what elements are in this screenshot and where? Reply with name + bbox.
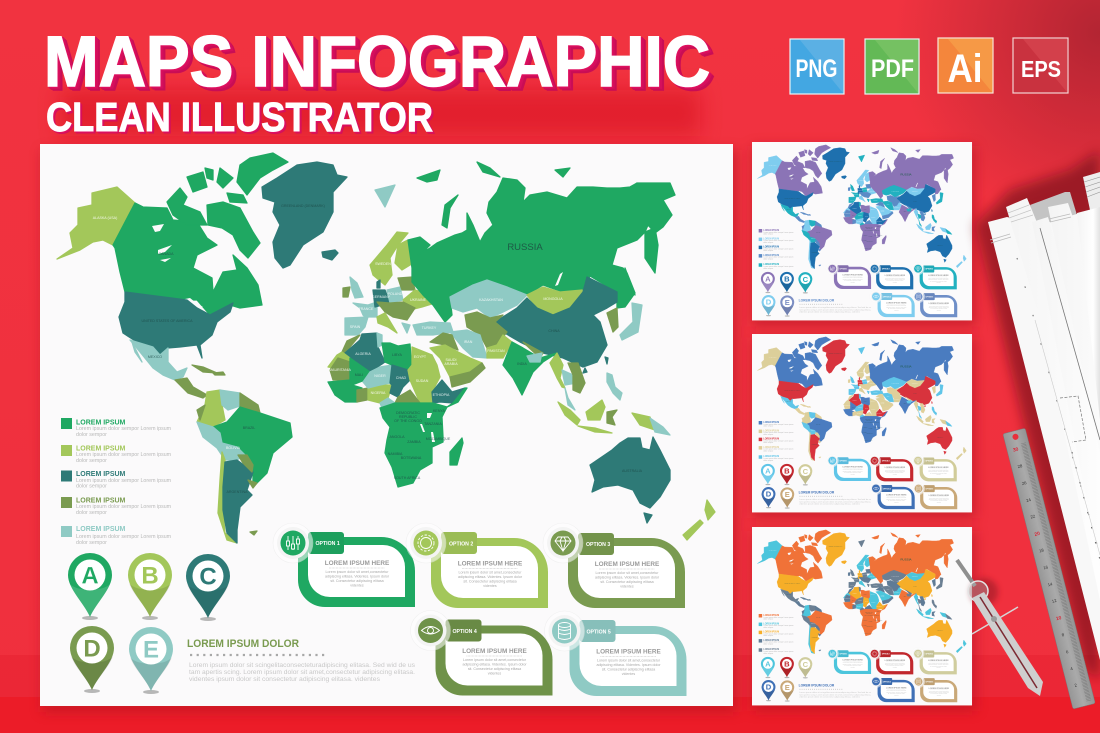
- icon: eye: [410, 610, 450, 650]
- world map: NAMIBIA: [388, 452, 403, 456]
- legend item 4: [61, 497, 172, 516]
- legend item 1: dolor sempor: [76, 432, 107, 438]
- world map: INDIA: [517, 362, 527, 366]
- legend item 2: Lorem ipsum dolor sempor Lorem ipsum: [76, 452, 172, 458]
- card: option 5: Lorem ipsum dolor sit amet,consectetur: [597, 658, 661, 662]
- card: option 5: [544, 611, 686, 696]
- world map: EGYPT: [414, 355, 427, 359]
- world map: CANADA: [159, 252, 174, 256]
- ruler: 18: [1038, 547, 1045, 553]
- card: option 1: videntes: [350, 584, 364, 588]
- title shadow: [60, 90, 700, 136]
- legend item 3: [61, 470, 172, 490]
- Russia: [408, 178, 675, 322]
- world map: REPUBLIC: [399, 415, 417, 419]
- legend item 1: LOREM IPSUM: [76, 420, 126, 426]
- legend item 3: dolor sempor: [76, 484, 107, 490]
- subtitle: CLEAN ILLUSTRATOR: [46, 94, 433, 140]
- card: option 2: LOREM IPSUM HERE: [458, 560, 523, 568]
- ruler: 26: [1021, 480, 1028, 486]
- card: option 2: [406, 523, 548, 608]
- card: option 3: videntes: [620, 584, 634, 588]
- legend item 2: LOREM IPSUM: [76, 446, 126, 452]
- tab: OPTION 1: [316, 541, 340, 547]
- pin C: C: [199, 564, 217, 590]
- world map: OF THE CONGO: [394, 419, 422, 423]
- world map: ARGENTINA: [227, 490, 248, 494]
- card: option 1: sit. Consectetur adipiscing elitasa: [330, 579, 384, 583]
- badge: PNG: [790, 39, 844, 94]
- world map: LIBYA: [392, 353, 403, 357]
- ruler: 2: [1074, 682, 1078, 688]
- legend item 5: LOREM IPSUM: [76, 526, 126, 533]
- blueprint rolls: [975, 150, 1100, 700]
- world map: FRANCE: [359, 307, 374, 311]
- ruler: 30: [1012, 447, 1019, 454]
- ruler: 4: [1070, 666, 1074, 671]
- world map: MOZAMBIQUE: [426, 437, 451, 441]
- world map: MALI: [355, 373, 363, 377]
- legend item 4: Lorem ipsum dolor sempor Lorem ipsum: [76, 504, 172, 510]
- card: option 5: videntes: [622, 672, 635, 676]
- world map: ARABIA: [444, 362, 458, 366]
- pin B: B: [141, 562, 159, 590]
- card: option 3: adipiscing elitasa. Videntes. Ipsum dolor: [595, 576, 660, 580]
- world map: GREENLAND (DENMARK): [281, 204, 325, 208]
- legend item 2: [61, 445, 172, 464]
- legend item 5: Lorem ipsum dolor sempor Lorem ipsum: [76, 534, 172, 540]
- world map: MONGOLIA: [543, 297, 563, 301]
- world map: BRAZIL: [243, 426, 255, 430]
- card: option 4: Lorem ipsum dolor sit amet,consectetur: [463, 658, 527, 662]
- Africa: [342, 335, 360, 353]
- ruler: 12: [1051, 598, 1058, 604]
- world map: ANGOLA: [390, 435, 405, 439]
- card: option 2: sit. Consectetur adipiscing elitasa: [463, 580, 517, 584]
- card: option 5: LOREM IPSUM HERE: [596, 648, 662, 656]
- world map: SAUDI: [446, 358, 456, 362]
- world map: SWEDEN: [375, 262, 391, 266]
- badge: EPS: [1013, 38, 1068, 93]
- ruler: 24: [1026, 497, 1032, 503]
- text block: lorem ipsum dolor: Lorem ipsum dolor sit scingelitaconsecteturadipiscing elitasa. Sed wid de us: [189, 662, 415, 669]
- world map: TURKEY: [422, 326, 437, 330]
- badge: Ai: [938, 38, 993, 93]
- tab: [578, 533, 614, 555]
- legend item 1: [61, 418, 172, 438]
- world map: GERMANY: [372, 295, 391, 299]
- badge: PDF: [865, 39, 919, 94]
- world map: MEXICO: [148, 355, 162, 359]
- ruler: 20: [1034, 531, 1041, 538]
- tab: OPTION 4: [452, 629, 477, 635]
- world map: KAZAKHSTAN: [479, 298, 503, 302]
- world map: BOTSWANA: [401, 456, 422, 460]
- world map: DEMOCRATIC: [396, 411, 420, 415]
- world map: ALGERIA: [355, 352, 371, 356]
- panel: main world map: [40, 144, 733, 706]
- tab: OPTION 3: [586, 542, 610, 548]
- icon: gear: [406, 523, 446, 563]
- card: option 3: Lorem ipsum dolor sit amet,consectetur: [596, 571, 659, 575]
- text block: lorem ipsum dolor: [187, 638, 415, 683]
- ruler: [1003, 428, 1095, 709]
- thumbnail: purple and blue map: [752, 142, 972, 320]
- legend item 5: [61, 526, 172, 546]
- tab: OPTION 2: [449, 542, 473, 548]
- legend item 2: dolor sempor: [76, 458, 107, 464]
- card: option 4: videntes: [488, 672, 501, 676]
- pin D: [70, 626, 114, 693]
- pin C: [186, 554, 230, 621]
- panel shadows: [42, 146, 976, 712]
- world map: KENYA: [433, 409, 446, 413]
- card: option 4: LOREM IPSUM HERE: [462, 648, 528, 655]
- badge: PNG: PNG: [796, 55, 838, 83]
- compass: [957, 560, 1043, 696]
- world map: CHINA: [548, 329, 560, 333]
- card: option 3: [543, 523, 685, 608]
- map labels: ALASKA (USA): [93, 216, 117, 220]
- world map: SOUTH AFRICA: [394, 476, 421, 480]
- pin D: D: [83, 636, 101, 662]
- icon: sliders: [273, 523, 313, 563]
- pin E: [129, 627, 173, 694]
- world map: CHAD: [396, 376, 406, 380]
- legend item 1: Lorem ipsum dolor sempor Lorem ipsum: [76, 426, 172, 432]
- ruler: 16: [1043, 564, 1049, 570]
- ruler: 14: [1047, 581, 1054, 587]
- card: option 4: [410, 610, 552, 696]
- world map: UNITED STATES OF AMERICA: [142, 319, 193, 323]
- ruler: 28: [1017, 463, 1023, 469]
- card: option 1: adipiscing elitasa. Videntes. Ipsum dolor: [325, 574, 390, 578]
- Europe: [345, 317, 368, 335]
- ruler: 6: [1065, 649, 1070, 654]
- text block: lorem ipsum dolor: LOREM IPSUM DOLOR: [187, 638, 299, 650]
- thumbnail: orange map: [752, 527, 972, 705]
- text block: lorem ipsum dolor: tam apertis scing. Lorem ipsum dolor sit amet,consectetur adipiscing elitasa.: [189, 669, 415, 676]
- world map: SPAIN: [350, 325, 361, 329]
- world map: NIGER: [374, 374, 386, 378]
- legend item 3: LOREM IPSUM: [76, 471, 126, 478]
- card: option 2: videntes: [483, 584, 497, 588]
- world map: SUDAN: [416, 379, 429, 383]
- card: option 1: Lorem ipsum dolor sit amet,consectetur: [326, 570, 389, 574]
- world map: NIGERIA: [371, 391, 386, 395]
- world map: RUSSIA: [507, 242, 543, 253]
- legend item 4: dolor sempor: [76, 510, 107, 516]
- icon: diamond: [543, 523, 583, 563]
- legend item 5: dolor sempor: [76, 540, 107, 546]
- world map: PAKISTAN: [487, 349, 505, 353]
- badge: PDF: PDF: [871, 55, 914, 83]
- card: option 2: Lorem ipsum dolor sit amet,consectetur: [459, 570, 522, 574]
- tab: [308, 532, 344, 554]
- card: option 5: adipiscing elitasa. Videntes. Ipsum dolor: [596, 663, 661, 667]
- tab: [446, 620, 482, 642]
- card: option 5: sit. Consectetur adipiscing elitasa: [602, 668, 655, 672]
- card: option 4: sit. Consectetur adipiscing elitasa: [468, 667, 521, 671]
- thumbnail: blue and red map: [752, 334, 972, 512]
- North America: [57, 187, 135, 259]
- card: option 1: LOREM IPSUM HERE: [325, 560, 390, 567]
- world map: UKRAINE: [410, 298, 427, 302]
- world map: IRAN: [464, 340, 473, 344]
- world map: TANZANIA: [424, 422, 442, 426]
- badge: EPS: EPS: [1021, 56, 1061, 82]
- Asia: [450, 280, 527, 318]
- tab: [441, 532, 477, 554]
- card: option 4: adipiscing elitasa. Videntes. Ipsum dolor: [462, 662, 527, 666]
- text block: lorem ipsum dolor: videntes ipsum dolor sit consectetur adipiscing elitasa. videntes: [189, 676, 380, 683]
- badge: Ai: Ai: [948, 47, 982, 91]
- ruler: 10: [1055, 615, 1062, 622]
- pin B: [128, 553, 172, 620]
- pin A: A: [81, 562, 99, 590]
- tab: [580, 620, 616, 642]
- tab: OPTION 5: [586, 630, 611, 636]
- world map: ETHIOPIA: [433, 393, 450, 397]
- world map: BOLIVIA: [226, 446, 241, 450]
- Australia and New Zealand: [590, 437, 670, 508]
- card: option 1: [273, 523, 415, 607]
- ruler: 8: [1061, 632, 1065, 637]
- world map: POLAND: [388, 292, 403, 296]
- legend: [61, 418, 172, 546]
- card: option 3: sit. Consectetur adipiscing elitasa: [600, 580, 654, 584]
- world map: [57, 153, 715, 543]
- legend item 3: Lorem ipsum dolor sempor Lorem ipsum: [76, 478, 172, 484]
- card: option 3: LOREM IPSUM HERE: [595, 561, 660, 568]
- world map: AUSTRALIA: [622, 469, 643, 473]
- title: MAPS INFOGRAPHIC: [44, 23, 710, 102]
- ruler: 22: [1030, 513, 1036, 520]
- world map: MAURITANIA: [329, 368, 352, 372]
- icon: database: [544, 611, 584, 651]
- card: option 2: adipiscing elitasa. Videntes. Ipsum dolor: [458, 575, 523, 579]
- pin A: [68, 553, 112, 620]
- pin E: E: [143, 636, 159, 664]
- South America: [197, 390, 225, 427]
- world map: ZAMBIA: [407, 440, 421, 444]
- legend item 4: LOREM IPSUM: [76, 498, 126, 504]
